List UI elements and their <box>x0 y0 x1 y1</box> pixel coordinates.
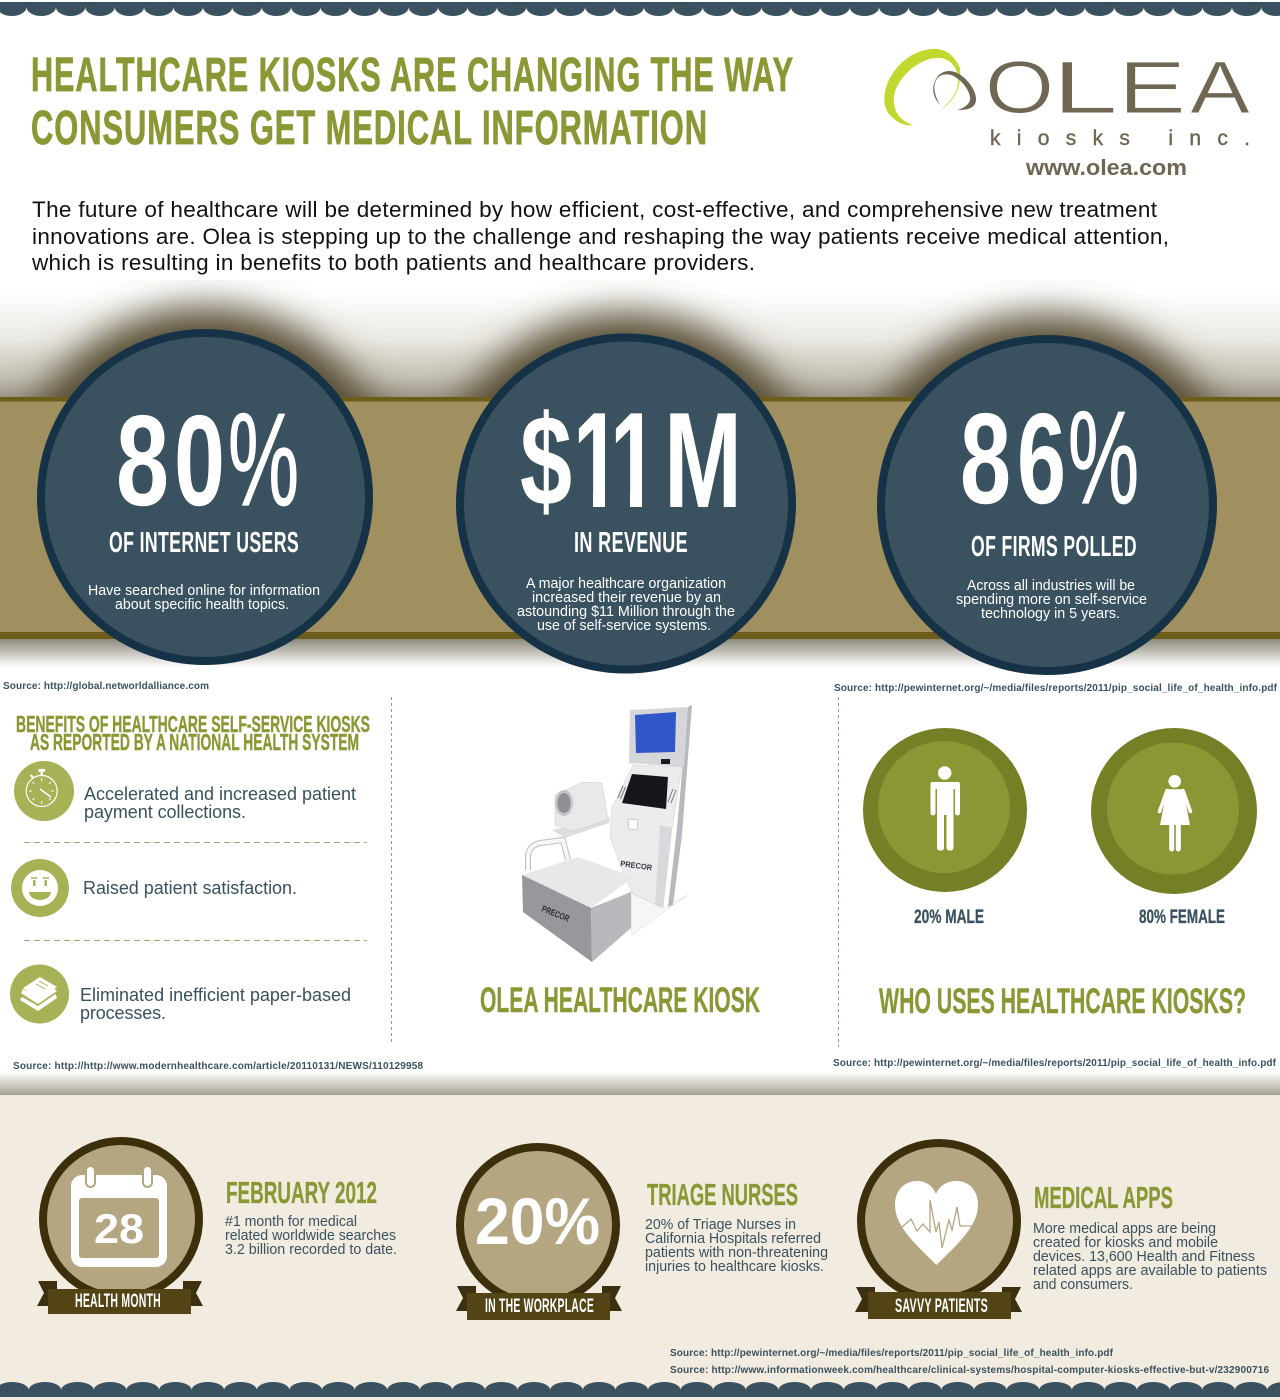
stat circle: $11 M: increased their revenue by an <box>532 590 721 606</box>
kiosk illustration: PRECOR <box>540 904 571 924</box>
february text: 3.2 billion recorded to date. <box>225 1242 397 1258</box>
triage text <box>645 1177 828 1275</box>
benefit text: payment collections: Accelerated and increased patient <box>84 784 356 804</box>
benefit text: paper: Eliminated inefficient paper-based <box>80 985 351 1005</box>
stat circle: 80% <box>41 333 369 661</box>
stat circle: $11 M: astounding $11 Million through the <box>517 604 735 620</box>
logo: Olea Kiosks: L <box>1052 46 1118 129</box>
bottom scalloped border <box>0 1382 1280 1397</box>
medical apps text: MEDICAL APPS <box>1034 1180 1173 1215</box>
title: HEALTHCARE KIOSKS ARE CHANGING THE WAY <box>31 49 794 102</box>
stat circle: 80%: % <box>228 386 299 533</box>
benefits heading: BENEFITS OF HEALTHCARE SELF-SERVICE KIOSKS <box>16 711 370 737</box>
stat circle: $11 M: IN REVENUE <box>574 527 688 559</box>
source: pew middle: Source: http://pewinternet.org/~/media/files/reports/2011/pip_social_life_of_health_info.pdf <box>833 1058 1277 1069</box>
logo: Olea Kiosks: O <box>985 46 1054 129</box>
medical apps text: and consumers. <box>1033 1277 1133 1293</box>
title: CONSUMERS GET MEDICAL INFORMATION <box>31 102 708 155</box>
benefit text: payment collections <box>84 784 356 822</box>
intro text <box>31 197 1169 275</box>
stat circle: 86%: % <box>1068 384 1139 531</box>
benefits heading: AS REPORTED BY A NATIONAL HEALTH SYSTEM <box>30 729 359 755</box>
stat circle: $11 M: A major healthcare organization <box>526 576 726 592</box>
february text: #1 month for medical <box>225 1214 357 1230</box>
stat circle: 86%: technology in 5 years. <box>981 606 1120 622</box>
benefits heading <box>16 711 370 755</box>
stat circle: $11 M: $ <box>520 389 572 533</box>
medical apps text <box>1033 1180 1267 1293</box>
benefit text: payment collections: payment collections. <box>84 802 246 822</box>
badge: in the workplace: 20% <box>475 1184 600 1258</box>
icon: smiley <box>11 859 69 917</box>
stat circle: 86%: 8 <box>960 387 1011 531</box>
triage text: California Hospitals referred <box>645 1231 821 1247</box>
badge: health month: 28 <box>94 1205 144 1252</box>
source: pew bottom: Source: http://pewinternet.org/~/media/files/reports/2011/pip_social_life_of_health_info.pdf <box>670 1348 1114 1359</box>
intro text: The future of healthcare will be determined by how efficient, cost-effective, and comprehensive new treatment <box>32 197 1158 222</box>
kiosk caption: OLEA HEALTHCARE KIOSK <box>480 981 760 1020</box>
shadow above band <box>0 280 1280 397</box>
stat circle: 80%: Have searched online for information <box>88 583 320 599</box>
top scalloped border <box>0 2 1280 17</box>
stat circle: 86%: OF FIRMS POLLED <box>971 531 1137 563</box>
february text: FEBRUARY 2012 <box>226 1175 377 1210</box>
badge: health month <box>37 1141 203 1314</box>
stat circle: $11 M: M <box>664 384 742 536</box>
cream lower panel <box>0 1072 1280 1400</box>
badge: savvy patients <box>855 1143 1022 1319</box>
kiosk illustration <box>522 705 692 962</box>
stat circle: 80%: 8 <box>116 389 169 533</box>
logo: Olea Kiosks: A <box>1190 46 1251 129</box>
badge: savvy patients: SAVVY PATIENTS <box>895 1296 988 1317</box>
stat circle: $11 M <box>460 338 792 670</box>
female circle <box>1091 728 1257 894</box>
male label: 20% MALE <box>914 906 984 928</box>
female label: 80% FEMALE <box>1139 906 1225 928</box>
title <box>31 49 794 155</box>
badge: in the workplace: IN THE WORKPLACE <box>485 1296 594 1317</box>
medical apps text: More medical apps are being <box>1033 1221 1216 1237</box>
icon: stopwatch <box>14 761 74 821</box>
badge: health month: HEALTH MONTH <box>75 1291 161 1312</box>
kiosk illustration: PRECOR <box>620 859 653 872</box>
logo: Olea Kiosks: E <box>1118 46 1186 129</box>
triage text: TRIAGE NURSES <box>647 1177 798 1212</box>
stat circle: 86%: 6 <box>1017 387 1066 531</box>
intro text: which is resulting in benefits to both patients and healthcare providers. <box>31 250 755 275</box>
icon: books <box>10 964 69 1024</box>
source: networld alliance: Source: http://global.networldalliance.com <box>3 681 209 692</box>
stat circle: $11 M: 1 <box>573 384 621 536</box>
source: modern healthcare: Source: http://http://www.modernhealthcare.com/article/20110131/NEWS/110129958 <box>13 1061 423 1072</box>
triage text: patients with non-threatening <box>645 1245 828 1261</box>
olive band <box>0 397 1280 667</box>
benefit text: paper <box>80 985 351 1023</box>
logo: Olea Kiosks: kiosks inc. <box>990 127 1250 150</box>
triage text: 20% of Triage Nurses in <box>645 1217 796 1233</box>
intro text: innovations are. Olea is stepping up to the challenge and reshaping the way patients receive medical attention, <box>32 224 1169 249</box>
logo: Olea Kiosks <box>884 46 1251 180</box>
stat circle: 86%: spending more on self-service <box>956 592 1147 608</box>
logo: Olea Kiosks: www.olea.com <box>1025 155 1187 180</box>
medical apps text: devices. 13,600 Health and Fitness <box>1033 1249 1255 1265</box>
february text: related worldwide searches <box>225 1228 396 1244</box>
stat circle: 86% <box>881 339 1213 671</box>
stat circle: 86%: Across all industries will be <box>967 578 1135 594</box>
medical apps text: created for kiosks and mobile <box>1033 1235 1218 1251</box>
male circle <box>863 728 1027 892</box>
stat circle: $11 M: 1 <box>610 384 658 536</box>
source: information week: Source: http://www.informationweek.com/healthcare/clinical-systems/hospital-computer-kiosks-effective-but-v/232900716 <box>670 1365 1269 1376</box>
february text <box>225 1175 397 1258</box>
badge: in the workplace <box>456 1147 622 1320</box>
benefit text: paper: processes. <box>80 1003 166 1023</box>
stat circle: 80%: about specific health topics. <box>115 597 289 613</box>
triage text: injuries to healthcare kiosks. <box>645 1259 824 1275</box>
stat circle: 80%: OF INTERNET USERS <box>109 527 299 559</box>
benefit text: satisfaction: Raised patient satisfaction. <box>83 878 297 898</box>
source: pew upper: Source: http://pewinternet.org/~/media/files/reports/2011/pip_social_life_of_health_info.pdf <box>834 683 1278 694</box>
stat circle: $11 M: use of self-service systems. <box>537 618 711 634</box>
stat circle: 80%: 0 <box>174 389 225 533</box>
medical apps text: related apps are available to patients <box>1033 1263 1267 1279</box>
